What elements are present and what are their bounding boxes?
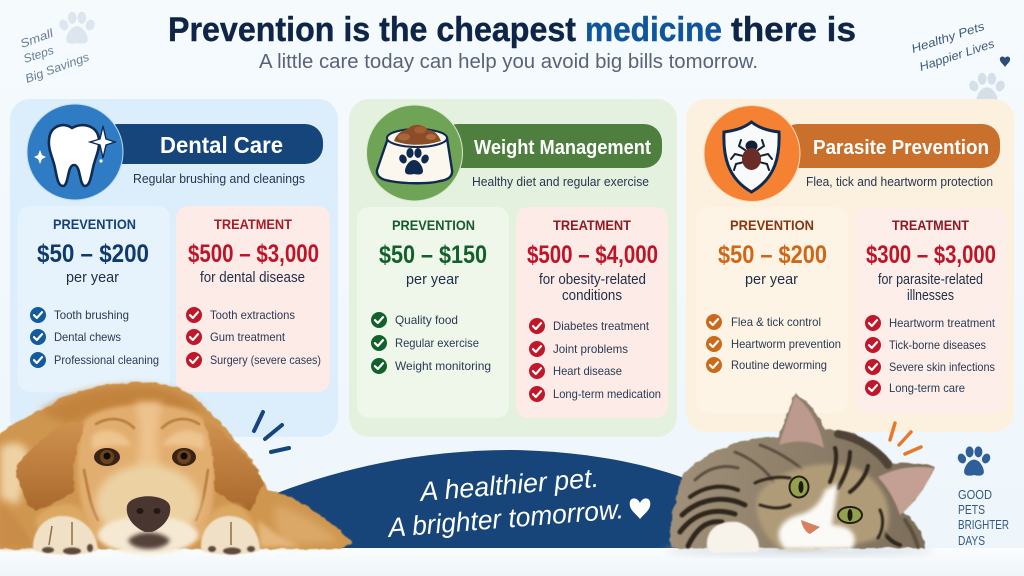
banner: a healthier pet: A healthier pet. <box>417 463 600 507</box>
cat face <box>757 464 889 549</box>
checklist: Tooth brushing <box>54 308 129 322</box>
checklist: Quality food <box>395 313 458 327</box>
illustration: tabby cat <box>665 393 935 555</box>
icon: tooth <box>27 104 123 200</box>
card: prevention: $50 – $150 <box>379 241 487 269</box>
description: Healthy diet and regular exercise <box>472 174 649 189</box>
card: treatment: TREATMENT <box>892 217 969 233</box>
card: prevention: PREVENTION <box>392 217 475 233</box>
dog legs <box>35 504 258 535</box>
cat paw <box>707 522 759 553</box>
checklist: Heartworm prevention <box>731 337 841 351</box>
card: treatment: TREATMENT <box>214 216 292 232</box>
cat white muzzle <box>779 483 855 549</box>
panel: dental care <box>10 99 338 437</box>
cat nose <box>801 520 820 534</box>
note: healthy pets happier lives <box>910 19 1010 74</box>
dog right paw <box>201 516 260 554</box>
description: Flea, tick and heartworm protection <box>806 174 993 189</box>
banner: a healthier pet <box>277 450 684 548</box>
side note: good pets brighter days: GOOD <box>958 488 992 502</box>
pill heading: weight management: Weight Management <box>474 137 651 159</box>
card: prevention: per year <box>745 271 798 288</box>
panel: weight management <box>349 99 677 437</box>
cat face stripes <box>755 448 883 538</box>
card: treatment <box>176 206 330 392</box>
dog nose and mouth <box>127 496 170 549</box>
checklist: Regular exercise <box>395 336 479 350</box>
cat body <box>670 393 935 548</box>
card: prevention <box>18 206 170 392</box>
side note: good pets brighter days: BRIGHTER <box>958 518 1009 532</box>
card: prevention: PREVENTION <box>730 217 814 233</box>
card: treatment: $300 – $3,000 <box>866 241 996 269</box>
icon: blue paw <box>956 446 992 476</box>
checklist: Diabetes treatment <box>553 319 650 333</box>
card: treatment: TREATMENT <box>553 217 631 233</box>
icon: faded paw top left <box>58 12 96 44</box>
card: treatment: illnesses <box>907 287 954 304</box>
checklist: Flea & tick control <box>731 315 821 329</box>
description: Regular brushing and cleanings <box>133 171 305 186</box>
side note: good pets brighter days: DAYS <box>958 534 985 548</box>
card: treatment <box>516 207 668 418</box>
card: treatment: conditions <box>562 287 622 304</box>
card: treatment: $500 – $4,000 <box>527 241 658 269</box>
checklist: Routine deworming <box>731 358 827 372</box>
checklist <box>186 307 321 368</box>
checklist <box>865 315 996 396</box>
accent marks near dog <box>254 412 289 452</box>
cat ear left <box>779 396 824 448</box>
checklist <box>30 307 159 368</box>
icon: food bowl <box>366 105 462 201</box>
icon: shield with tick <box>704 106 800 202</box>
note: small steps big savings <box>18 12 96 86</box>
pill heading: dental care <box>100 124 323 164</box>
cat shadow <box>665 547 935 555</box>
card: prevention: $50 – $200 <box>718 241 827 269</box>
side note: good pets brighter days <box>956 446 1009 548</box>
icon: small heart <box>1000 57 1010 67</box>
side note: good pets brighter days: PETS <box>958 503 985 517</box>
accent marks near cat <box>890 423 921 454</box>
panel: parasite prevention <box>686 99 1014 432</box>
note: healthy pets happier lives: Happier Lives <box>918 36 996 74</box>
card: prevention <box>357 207 509 418</box>
checklist: Long-term care <box>889 381 965 395</box>
note: small steps big savings: Small <box>18 26 55 51</box>
card: treatment: $500 – $3,000 <box>188 240 319 268</box>
title: medicine <box>585 11 722 49</box>
note: small steps big savings: Big Savings <box>23 50 91 86</box>
card: prevention: $50 – $200 <box>37 240 149 268</box>
checklist: Heart disease <box>553 364 622 378</box>
checklist: Dental chews <box>54 330 121 344</box>
checklist: Long-term medication <box>553 387 661 401</box>
card: treatment <box>855 207 1007 413</box>
card: prevention: per year <box>406 271 459 288</box>
subtitle: A little care today can help you avoid big bills tomorrow. <box>259 51 758 73</box>
dog head <box>77 405 214 540</box>
pill heading: weight management <box>440 124 662 168</box>
card: treatment: for parasite-related <box>878 271 983 288</box>
checklist: Gum treatment <box>210 330 286 344</box>
title: there is <box>731 11 856 49</box>
dog left paw <box>33 516 98 554</box>
cat eyes <box>788 476 863 524</box>
dog ears <box>15 420 84 512</box>
checklist <box>371 312 491 374</box>
checklist: Weight monitoring <box>395 359 491 373</box>
banner: a healthier pet: A brighter tomorrow. <box>385 494 625 543</box>
checklist: Severe skin infections <box>889 360 995 374</box>
card: treatment: for obesity-related <box>539 271 646 288</box>
icon: heart <box>630 498 650 519</box>
pill heading: dental care: Dental Care <box>160 132 283 158</box>
card: prevention: per year <box>66 269 119 286</box>
checklist <box>529 318 661 402</box>
cat ear right <box>878 467 934 515</box>
note: small steps big savings: Steps <box>22 43 55 66</box>
checklist: Tooth extractions <box>210 308 295 322</box>
title: Prevention is the cheapest <box>168 11 576 49</box>
dog muzzle <box>96 465 200 541</box>
checklist: Joint problems <box>553 342 628 356</box>
floor <box>0 548 1024 576</box>
pill heading: parasite prevention <box>780 124 1000 168</box>
checklist: Heartworm treatment <box>889 316 996 330</box>
checklist: Professional cleaning <box>54 353 159 367</box>
card: prevention <box>696 207 848 413</box>
cat stripes <box>680 434 918 547</box>
checklist: Tick-borne diseases <box>889 338 986 352</box>
card: treatment: for dental disease <box>200 269 305 286</box>
card: prevention: PREVENTION <box>53 216 136 232</box>
pill heading: parasite prevention: Parasite Prevention <box>813 137 989 159</box>
dog eyes <box>94 448 196 466</box>
checklist <box>706 314 841 373</box>
checklist: Surgery (severe cases) <box>210 353 321 367</box>
note: healthy pets happier lives: Healthy Pets <box>910 19 986 56</box>
dog body and fur <box>0 382 353 549</box>
illustration: golden retriever <box>0 382 353 554</box>
icon: faded paw top right <box>968 73 1006 105</box>
